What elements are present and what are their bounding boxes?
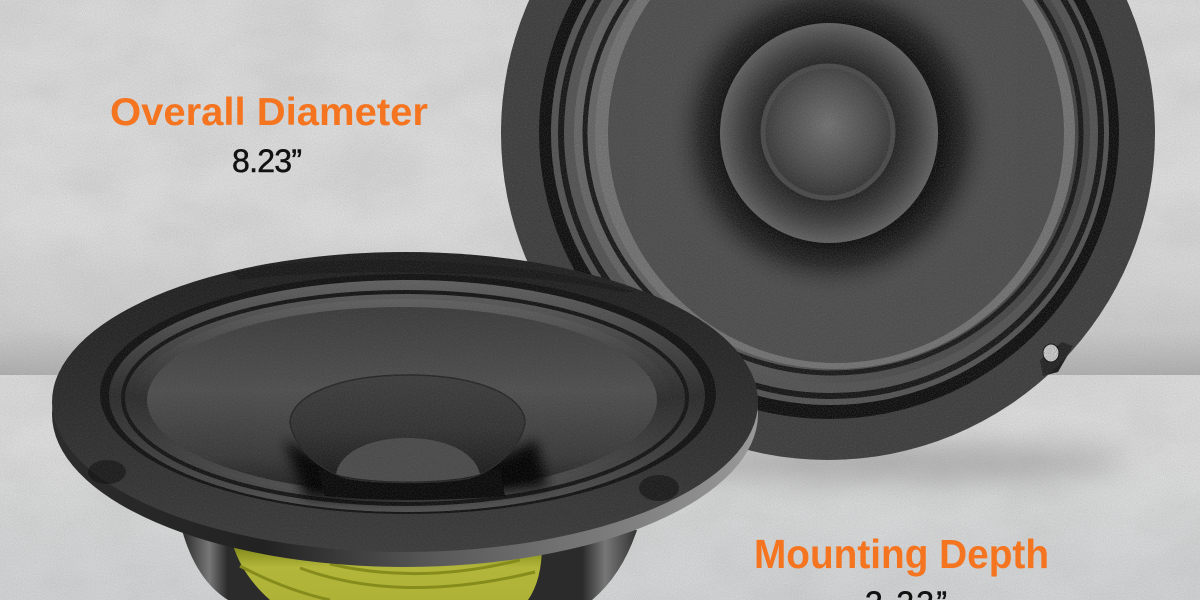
shadow around horn <box>667 0 997 298</box>
value: 8.23” <box>232 143 302 179</box>
heading: Mounting Depth <box>754 531 1049 577</box>
texture overlay <box>50 250 760 570</box>
cone <box>147 307 657 493</box>
basket <box>182 530 637 600</box>
flange <box>52 252 758 552</box>
mounting tab <box>1040 342 1073 376</box>
rim edge <box>52 261 758 567</box>
cone shadow <box>284 440 548 500</box>
dust cap <box>336 438 480 482</box>
horn <box>290 375 525 482</box>
cone <box>608 0 1064 363</box>
label: mounting depth <box>754 531 1049 600</box>
front speaker, angled view <box>50 250 760 600</box>
horn <box>720 23 938 243</box>
surround rings <box>539 0 1119 419</box>
label: overall diameter <box>110 91 428 179</box>
magnet coil <box>233 545 542 600</box>
back speaker, front view <box>500 0 1160 460</box>
texture overlay <box>500 0 1160 460</box>
speaker frame <box>501 0 1155 460</box>
raised flange arc <box>232 260 635 292</box>
flange notches <box>88 460 126 484</box>
heading: Overall Diameter <box>110 91 428 134</box>
surround <box>100 274 716 514</box>
dust cap <box>763 66 893 198</box>
mounting hole <box>1043 344 1059 362</box>
